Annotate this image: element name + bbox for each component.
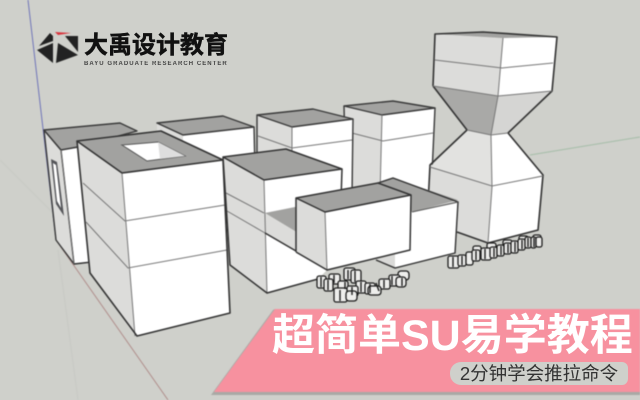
window xyxy=(51,159,64,216)
logo title: 大禹设计教育 xyxy=(84,32,228,59)
funnel xyxy=(433,86,498,135)
trees: back row xyxy=(448,235,542,268)
building: back left with window xyxy=(44,123,137,264)
top block xyxy=(433,34,503,96)
banner shadow xyxy=(211,309,640,395)
logo subtitle: BAYU GRADUATE RESEARCH CENTER xyxy=(84,61,228,67)
building: large front with courtyard xyxy=(77,131,230,336)
building: middle back xyxy=(257,109,353,195)
logo icon xyxy=(37,32,78,63)
lower taper xyxy=(430,130,492,187)
building: tall back right xyxy=(344,101,435,195)
building: low block front xyxy=(296,183,411,270)
notch floor xyxy=(265,206,300,234)
base block xyxy=(428,167,492,243)
banner headline: 超简单SU易学教程 xyxy=(272,312,633,360)
building: low block right xyxy=(376,178,458,268)
banner: pink ribbon xyxy=(214,309,640,392)
building: back second xyxy=(157,116,255,170)
trees: front cluster xyxy=(317,268,409,302)
hourglass tower xyxy=(428,32,557,243)
subtitle pill: 2分钟学会推拉命令 xyxy=(460,363,618,384)
courtyard opening xyxy=(122,142,185,161)
building: stepped centre xyxy=(223,149,342,293)
